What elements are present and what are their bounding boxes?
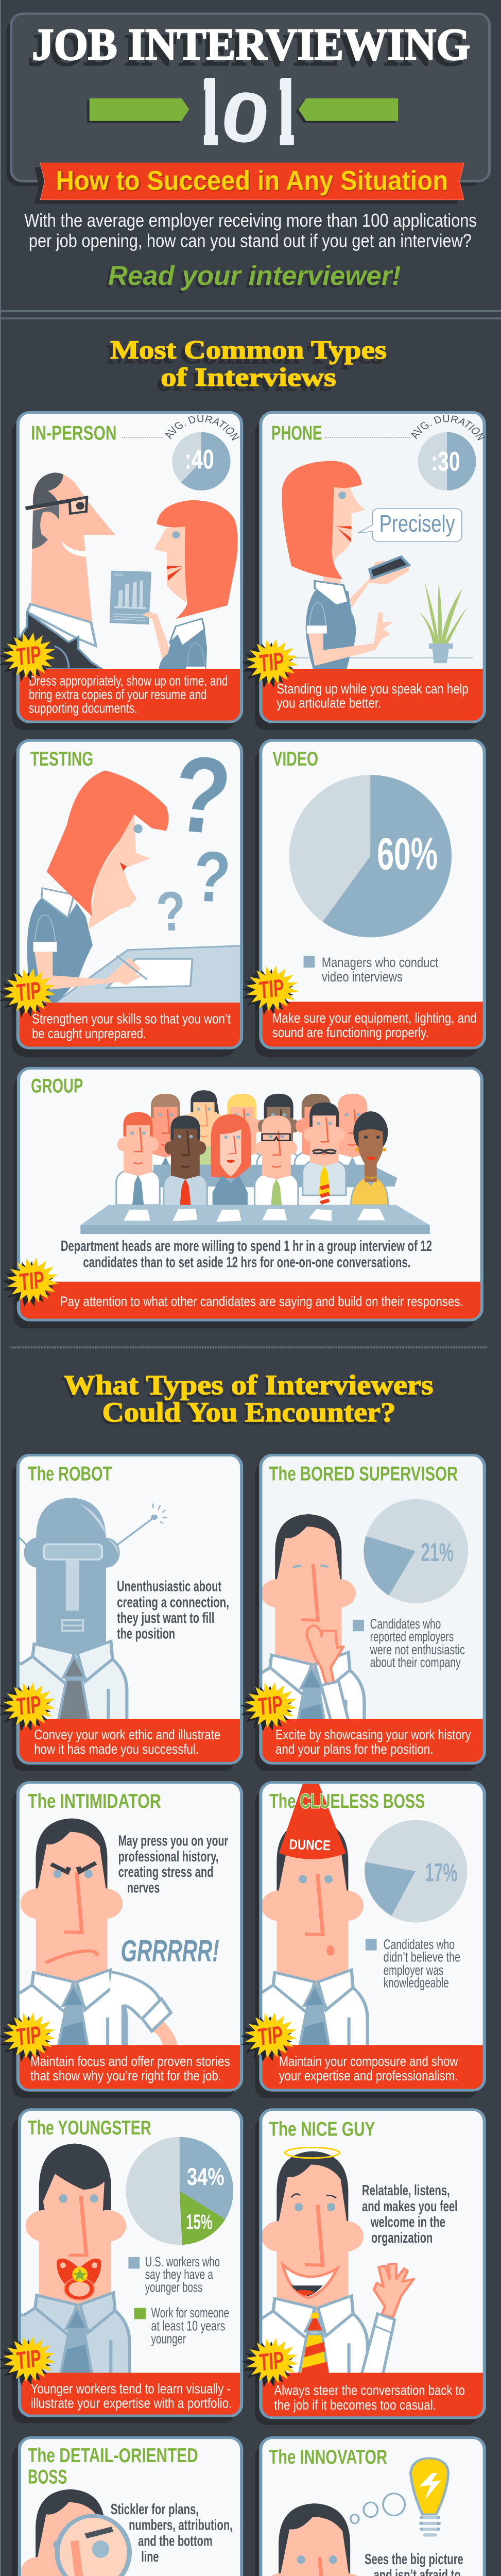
- tip text: testing: be caught unprepared.: [32, 1026, 146, 1041]
- title: video: VIDEO: [272, 748, 318, 770]
- illustration: interviewer man: [19, 472, 116, 669]
- tip text: nice guy: the job if it becomes too casual.: [274, 2398, 436, 2413]
- tip text: intimidator: that show why you’re right for the job.: [30, 2069, 221, 2084]
- illustration: candidate woman: [110, 500, 238, 670]
- pie: 17 percent: [365, 1820, 467, 1923]
- title: innovator: The INNOVATOR: [269, 2446, 387, 2468]
- icon: tip burst: [0, 2333, 59, 2388]
- pie: 21 percent: [364, 1499, 468, 1603]
- panel: the nice guy: [238, 2110, 486, 2425]
- big 101: 1: [265, 57, 304, 166]
- panel: the bored supervisor: [237, 1455, 486, 1771]
- legend: younger boss: say they have a: [145, 2267, 213, 2282]
- title: robot: The ROBOT: [28, 1463, 112, 1485]
- legend: candidates knowledgeable: [366, 1937, 460, 1991]
- title: detail-oriented boss: BOSS: [28, 2466, 67, 2488]
- icon: tip burst: TIP: [256, 648, 286, 677]
- speech bubble: precisely: Precisely: [379, 511, 455, 537]
- icon: tip burst: TIP: [17, 1266, 47, 1296]
- description: group: [61, 1238, 432, 1270]
- icon: tip burst: TIP: [255, 1691, 285, 1721]
- pie: 17 percent: 17%: [425, 1858, 458, 1887]
- panel: video: [238, 740, 486, 1057]
- icon: tip burst: [238, 2335, 302, 2391]
- description: intimidator: creating stress and: [118, 1863, 214, 1880]
- description: detail-oriented boss: and the bottom: [138, 2532, 213, 2549]
- panel: in-person: [0, 411, 264, 751]
- pie: average duration 30: [411, 415, 486, 490]
- icon: tip burst: TIP: [14, 2021, 43, 2051]
- legend: younger boss: [128, 2255, 229, 2347]
- panel: testing: [0, 733, 244, 1057]
- tip text: nice guy: [274, 2383, 465, 2413]
- header panel: [6, 14, 490, 204]
- illustration: bored man: [263, 1514, 366, 1719]
- legend: younger boss: younger: [151, 2331, 186, 2347]
- left edge line: [0, 0, 1, 2576]
- legend: managers: video interviews: [322, 970, 403, 985]
- title: in-person: IN-PERSON: [31, 422, 116, 445]
- legend: candidates knowledgeable: employer was: [384, 1963, 443, 1978]
- tip text: robot: Convey your work ethic and illustrate: [34, 1727, 220, 1742]
- description: detail-oriented boss: numbers, attribution,: [129, 2517, 233, 2533]
- icon: tip burst: TIP: [14, 977, 43, 1007]
- heading: most common types: of Interviews: [157, 367, 332, 397]
- arrow: right: [296, 98, 398, 123]
- icon: tip burst: TIP: [256, 974, 286, 1004]
- tip text: clueless: [279, 2054, 458, 2084]
- description: detail-oriented boss: line: [141, 2548, 159, 2565]
- icon: tip burst: TIP: [256, 2347, 286, 2377]
- intro text: [24, 210, 477, 251]
- description: detail-oriented boss: Stickler for plans,: [111, 2501, 199, 2517]
- pie: 21 percent: 21%: [421, 1538, 454, 1567]
- title: clueless boss: The CLUELESS BOSS: [269, 1790, 425, 1812]
- arrow: left: [87, 98, 189, 123]
- illustration: man with magnifier: [21, 2489, 132, 2576]
- heading: most common types: [107, 335, 387, 397]
- tip text: bored: [275, 1727, 471, 1757]
- legend: managers: [304, 955, 438, 985]
- tip text: intimidator: [30, 2054, 230, 2084]
- illustration: angry man: [20, 1819, 178, 2045]
- call to action: Read your interviewer!: [108, 260, 401, 291]
- panel: the robot: [0, 1455, 244, 1771]
- illustration: front table: [80, 1205, 430, 1234]
- tip text: video: sound are functioning properly.: [272, 1025, 429, 1041]
- tip text: bored: and your plans for the position.: [275, 1742, 433, 1757]
- speech bubble: precisely: [358, 509, 462, 541]
- description: robot: creating a connection,: [117, 1594, 229, 1611]
- panel: the innovator: [238, 2438, 486, 2576]
- tip text: in-person: bring extra copies of your resume and: [29, 687, 206, 702]
- illustration: young man with pacifier: [26, 2144, 126, 2313]
- heading: most common types: of Interviews: [161, 363, 336, 392]
- big 101: 1: [188, 57, 229, 166]
- description: intimidator: nerves: [127, 1879, 160, 1896]
- icon: tip burst: [237, 1679, 301, 1735]
- tip text: youngster: illustrate your expertise with a portfolio.: [31, 2396, 232, 2411]
- icon: tip burst: [238, 963, 302, 1018]
- illustration: desk: [51, 946, 243, 1006]
- pie: average duration 30: :30: [431, 446, 460, 477]
- pie: average duration 40: :40: [185, 444, 214, 474]
- description: robot: they just want to fill: [117, 1609, 214, 1626]
- big 101: 0: [215, 75, 276, 160]
- description: robot: Unenthusiastic about: [117, 1578, 221, 1595]
- pie: average duration 30: AVG. DURATION: [411, 415, 486, 440]
- tip text: testing: Strengthen your skills so that you won’t: [32, 1011, 231, 1027]
- legend: candidates enthusiastic: [353, 1617, 465, 1670]
- panel: the detail-oriented boss: [0, 2438, 244, 2576]
- icon: tip burst: [0, 965, 59, 1021]
- legend: managers: Managers who conduct: [322, 955, 438, 970]
- heading: types of interviewers: [62, 1369, 433, 1431]
- illustration: robot: [19, 1498, 167, 1654]
- tip text: robot: how it has made you successful.: [34, 1742, 199, 1757]
- illustration: smiling man: [262, 2146, 415, 2373]
- description: detail-oriented boss: [111, 2501, 233, 2565]
- icon: tip burst: TIP: [255, 2021, 285, 2051]
- illustration: dunce hat: DUNCE: [289, 1837, 331, 1854]
- big 101: [204, 78, 294, 145]
- title: phone: PHONE: [271, 422, 322, 445]
- title: intimidator: The INTIMIDATOR: [28, 1790, 161, 1812]
- exclamation: grrrrr: GRRRRR!: [121, 1934, 219, 1968]
- illustration: thinking woman: [27, 770, 168, 1006]
- tip text: video: [272, 1011, 477, 1041]
- tip text: phone: you articulate better.: [277, 696, 381, 711]
- description: nice guy: [362, 2182, 458, 2246]
- icon: tip burst: [238, 636, 302, 691]
- description: nice guy: organization: [371, 2229, 433, 2246]
- description: nice guy: welcome in the: [370, 2213, 445, 2230]
- panel: phone: [242, 411, 486, 731]
- tip text: testing: [32, 1011, 231, 1041]
- legend: candidates enthusiastic: Candidates who: [370, 1617, 441, 1632]
- legend: candidates knowledgeable: knowledgeable: [384, 1975, 449, 1991]
- title: youngster: The YOUNGSTER: [28, 2117, 151, 2139]
- title: detail-oriented boss: The DETAIL-ORIENTED: [28, 2445, 198, 2467]
- icon: tip burst: [0, 630, 59, 685]
- pie: younger boss: [126, 2137, 233, 2245]
- tip text: in-person: Dress appropriately, show up on time, and: [29, 673, 228, 689]
- legend: younger boss: younger boss: [145, 2280, 202, 2295]
- description: robot: the position: [117, 1625, 175, 1642]
- illustration: question marks: ?: [154, 879, 188, 943]
- panel: group: [0, 1068, 486, 1329]
- pie: 60 percent: 60%: [377, 829, 438, 879]
- illustration: lightbulb: [351, 2458, 448, 2536]
- pie: younger boss: 15%: [186, 2210, 213, 2233]
- illustration: clueless man: [262, 1828, 369, 2045]
- heading: types of interviewers: Could You Encounter?: [100, 1400, 394, 1431]
- tip text: robot: [34, 1727, 220, 1757]
- heading: most common types: Most Common Types: [107, 340, 383, 369]
- icon: tip burst: [0, 1679, 59, 1735]
- title: group: GROUP: [31, 1075, 83, 1097]
- icon: tip burst: [0, 1255, 62, 1310]
- description: intimidator: May press you on your: [118, 1833, 228, 1849]
- icon: tip burst: TIP: [14, 2345, 43, 2375]
- subtitle ribbon: [34, 163, 464, 204]
- tip text: in-person: [29, 673, 228, 716]
- icon: tip burst: [237, 2010, 301, 2065]
- illustration: question marks: ?: [190, 836, 233, 918]
- icon: tip burst: TIP: [14, 1691, 43, 1721]
- heading: types of interviewers: What Types of Interviewers: [64, 1369, 433, 1401]
- title: detail-oriented boss: [28, 2445, 198, 2488]
- pie: average duration 40: AVG. DURATION: [165, 415, 240, 440]
- title: testing: TESTING: [30, 748, 93, 770]
- legend: younger boss: U.S. workers who: [145, 2255, 220, 2269]
- illustration: interview panel: [116, 1090, 397, 1208]
- panel: the intimidator: [0, 1783, 244, 2098]
- panel: the youngster: [0, 2110, 244, 2424]
- icon: tip burst: TIP: [14, 641, 43, 671]
- call to action: Read your interviewer!: [106, 263, 399, 294]
- legend: younger boss: Work for someone: [151, 2306, 229, 2320]
- pie: younger boss: 34%: [187, 2163, 224, 2191]
- panel: the clueless boss: [237, 1782, 486, 2098]
- description: innovator: [365, 2551, 463, 2576]
- icon: tip burst: [0, 2010, 59, 2065]
- description: intimidator: [118, 1833, 228, 1896]
- description: intimidator: professional history,: [118, 1848, 218, 1865]
- illustration: question marks: [158, 757, 228, 930]
- illustration: plant: [419, 583, 468, 663]
- pie: 60 percent: [289, 775, 452, 937]
- heading: types of interviewers: What Types of Interviewers: [62, 1372, 431, 1403]
- tip text: youngster: Younger workers tend to learn visually -: [31, 2381, 231, 2397]
- tip text: intimidator: Maintain focus and offer proven stories: [30, 2054, 230, 2069]
- legend: younger boss: at least 10 years: [151, 2318, 225, 2334]
- heading: most common types: Most Common Types: [110, 335, 387, 365]
- legend: candidates knowledgeable: Candidates who: [384, 1937, 455, 1952]
- pie: average duration 40: [165, 415, 240, 490]
- illustration: dunce hat: [279, 1782, 346, 1859]
- illustration: man with idea: [250, 2503, 411, 2576]
- title: nice guy: The NICE GUY: [269, 2118, 375, 2140]
- heading: types of interviewers: Could You Encounter?: [102, 1397, 395, 1428]
- illustration: woman on phone: [282, 461, 409, 669]
- tip text: phone: [277, 682, 469, 711]
- tip text: in-person: supporting documents.: [29, 701, 137, 716]
- illustration: question marks: ?: [166, 733, 237, 857]
- tip text: youngster: [31, 2381, 232, 2411]
- description: robot: [117, 1578, 229, 1642]
